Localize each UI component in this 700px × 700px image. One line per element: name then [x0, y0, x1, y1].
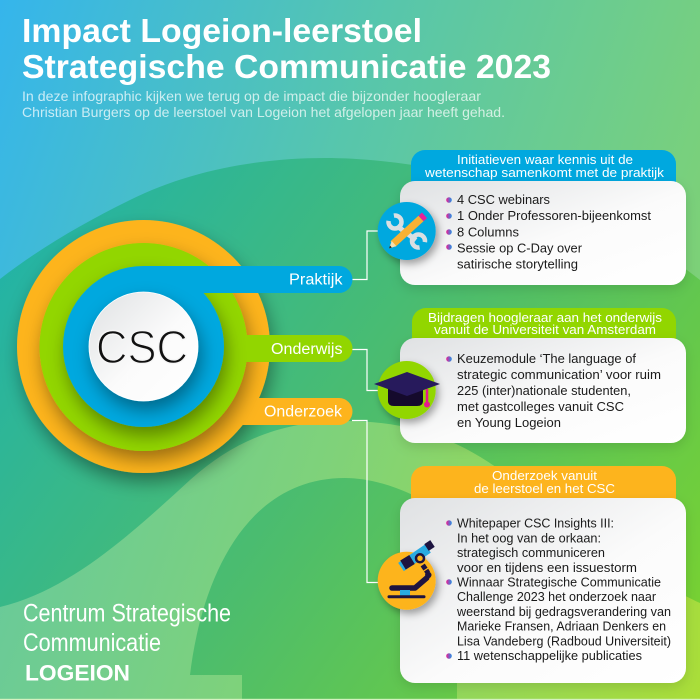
- ring: Praktijk: [63, 266, 352, 427]
- panel body: 11 wetenschappelijke publicaties: [457, 649, 642, 663]
- panel header: [411, 466, 676, 510]
- panel body: en Young Logeion: [457, 416, 561, 430]
- title: Impact Logeion-leerstoel: [22, 13, 422, 50]
- title: Strategische Communicatie 2023: [22, 49, 551, 86]
- panel header: [412, 308, 676, 345]
- panel header: [411, 150, 676, 190]
- panel body: Winnaar Strategische Communicatie: [457, 576, 661, 590]
- intro text: Christian Burgers op de leerstoel van Logeion het afgelopen jaar heeft gehad.: [22, 104, 505, 120]
- panel body: strategic communication’ voor ruim: [457, 368, 661, 382]
- panel body: Whitepaper CSC Insights III:: [457, 516, 614, 530]
- panel header: vanuit de Universiteit van Amsterdam: [434, 323, 656, 337]
- icon: graduation cap: [374, 361, 440, 419]
- connector lines: [352, 231, 382, 582]
- ring: Onderwijs: [40, 243, 352, 451]
- panel body: 4 CSC webinars: [457, 193, 550, 207]
- panel body: met gastcolleges vanuit CSC: [457, 400, 624, 414]
- title: [22, 13, 551, 86]
- label: Praktijk: Praktijk: [289, 272, 343, 288]
- panel: onderzoek: [378, 466, 686, 683]
- footer title: Communicatie: [23, 629, 161, 657]
- panel: praktijk: [378, 150, 686, 285]
- panel body: Sessie op C-Day over: [457, 242, 582, 256]
- panel body: [400, 338, 686, 443]
- panel: onderwijs: [374, 308, 686, 443]
- panel body: strategisch communiceren: [457, 546, 605, 560]
- panel body: In het oog van de orkaan:: [457, 532, 601, 546]
- logo: Logeion: LOGEION: [25, 661, 130, 686]
- ring: Onderzoek: [17, 220, 352, 473]
- center disc: [89, 292, 198, 401]
- panel body: voor en tijdens een issuestorm: [457, 561, 637, 575]
- panel header: Onderzoek vanuit: [492, 469, 598, 483]
- center label: CSC: [96, 321, 188, 373]
- intro text: [22, 88, 505, 120]
- panel body: 225 (inter)nationale studenten,: [457, 384, 631, 398]
- label: Onderzoek: Onderzoek: [264, 404, 342, 421]
- panel body: 8 Columns: [457, 226, 519, 240]
- concentric circle diagram: [17, 220, 352, 473]
- footer title: Centrum Strategische: [23, 600, 231, 628]
- panel header: Bijdragen hoogleraar aan het onderwijs: [428, 311, 662, 325]
- icon: wrench and pencil: [378, 202, 436, 260]
- panel header: wetenschap samenkomt met de praktijk: [424, 166, 665, 180]
- label: Onderwijs: Onderwijs: [271, 341, 343, 358]
- panel header: de leerstoel en het CSC: [474, 482, 615, 496]
- panel header: Initiatieven waar kennis uit de: [457, 153, 633, 167]
- panel body: Keuzemodule ‘The language of: [457, 352, 637, 366]
- panel body: Challenge 2023 het onderzoek naar: [457, 590, 656, 604]
- intro text: In deze infographic kijken we terug op de impact die bijzonder hoogleraar: [22, 88, 481, 104]
- icon: microscope: [378, 544, 436, 610]
- panel body: [400, 498, 686, 683]
- panel body: satirische storytelling: [457, 258, 578, 272]
- panel body: [400, 181, 686, 285]
- panel body: 1 Onder Professoren-bijeenkomst: [457, 209, 652, 223]
- panel body: Lisa Vandeberg (Radboud Universiteit): [457, 634, 671, 648]
- panel body: Marieke Fransen, Adriaan Denkers en: [457, 620, 666, 634]
- panel body: weerstand bij gedragsverandering van: [456, 605, 671, 619]
- footer title: [23, 600, 231, 657]
